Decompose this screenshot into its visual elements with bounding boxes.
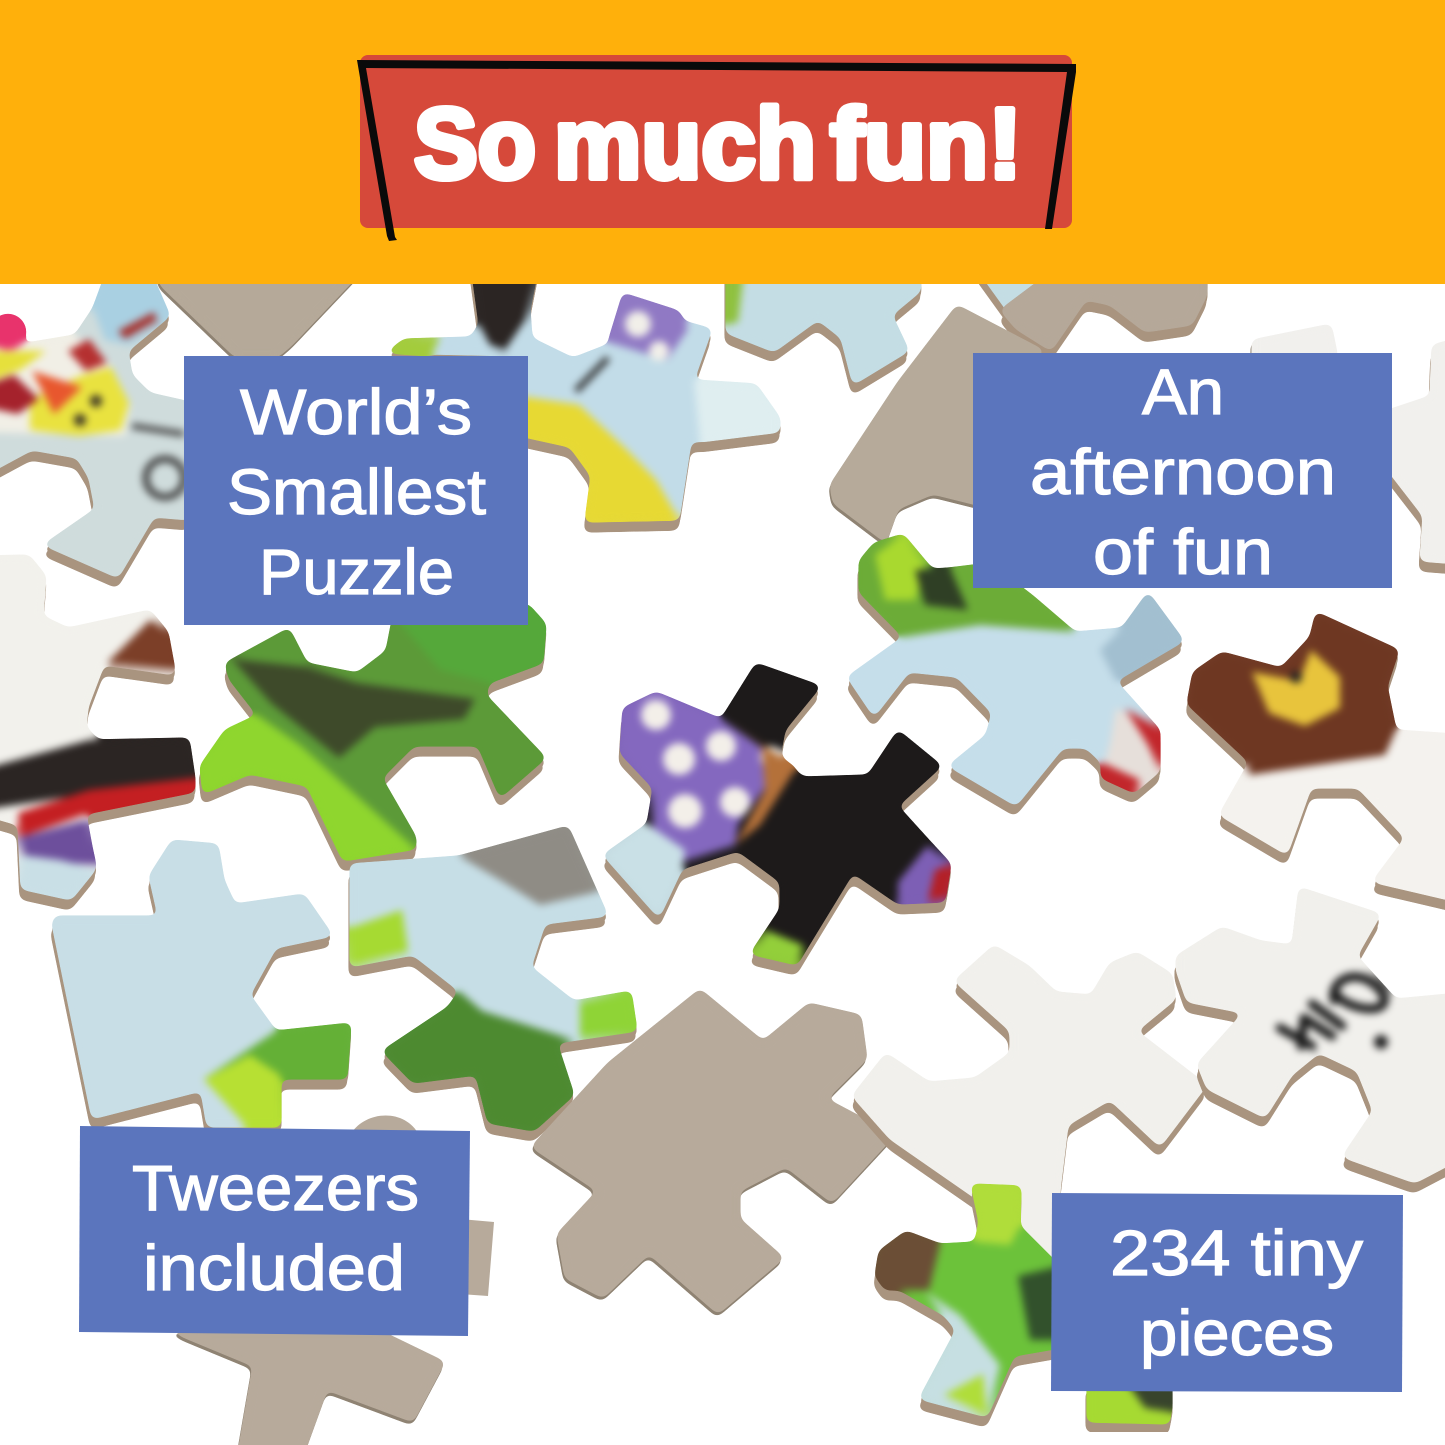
puzzle piece: top left	[0, 270, 190, 578]
label: Tweezers included: Tweezers	[132, 1152, 419, 1224]
label: Tweezers included: included	[143, 1232, 405, 1304]
label: 234 tiny pieces: pieces	[1140, 1297, 1334, 1369]
label: An afternoon of fun	[973, 353, 1392, 588]
puzzle piece: big gray centre	[531, 989, 895, 1314]
title: much	[554, 88, 816, 200]
puzzle piece: green	[200, 604, 546, 861]
puzzle piece: top gray	[155, 265, 368, 357]
puzzle piece: top right white B	[1385, 335, 1445, 565]
label: World's Smallest Puzzle	[184, 356, 528, 625]
puzzle piece: blue right	[847, 534, 1184, 806]
puzzle piece: top right gray	[1000, 265, 1207, 351]
title: So	[414, 88, 536, 200]
puzzle piece: top right blue fragment	[974, 265, 1069, 315]
title banner	[357, 55, 1076, 241]
puzzle piece: bottom gray	[166, 1330, 445, 1445]
puzzle piece: white centre right	[852, 945, 1207, 1258]
label: An afternoon of fun: of fun	[1093, 516, 1273, 588]
puzzle piece: bottom green	[875, 1184, 1060, 1417]
label: 234 tiny pieces: 234 tiny	[1110, 1217, 1363, 1289]
puzzle piece: lower left blue	[52, 840, 351, 1127]
puzzle piece: brown right	[1187, 612, 1445, 905]
label: An afternoon of fun: afternoon	[1030, 436, 1336, 508]
puzzle piece: large gray	[830, 305, 1045, 543]
puzzle piece: black with purple	[603, 663, 951, 965]
title	[414, 88, 1022, 200]
scribble on piece	[1280, 977, 1384, 1046]
puzzle piece: white right with scribble	[1176, 887, 1445, 1183]
label: An afternoon of fun: An	[1142, 356, 1224, 428]
label: World's Smallest Puzzle: World’s	[240, 376, 472, 448]
puzzle piece: small gray fragments	[350, 1115, 494, 1296]
label: World's Smallest Puzzle: Puzzle	[259, 536, 454, 608]
banner outline strokes	[357, 60, 1076, 241]
header band	[0, 0, 1445, 284]
label: 234 tiny pieces	[1051, 1193, 1403, 1392]
puzzle piece: bottom right fragment	[1087, 1380, 1172, 1424]
puzzle piece: top right blue	[726, 265, 921, 385]
label: Tweezers included	[79, 1126, 470, 1336]
puzzle piece: top right white A	[1252, 324, 1337, 365]
title: fun!	[830, 88, 1022, 200]
label: World's Smallest Puzzle: Smallest	[227, 456, 486, 528]
puzzle piece: top middle	[386, 265, 780, 522]
puzzle piece: lower middle blue and green	[350, 826, 637, 1131]
puzzle piece: left white and black	[0, 555, 195, 900]
